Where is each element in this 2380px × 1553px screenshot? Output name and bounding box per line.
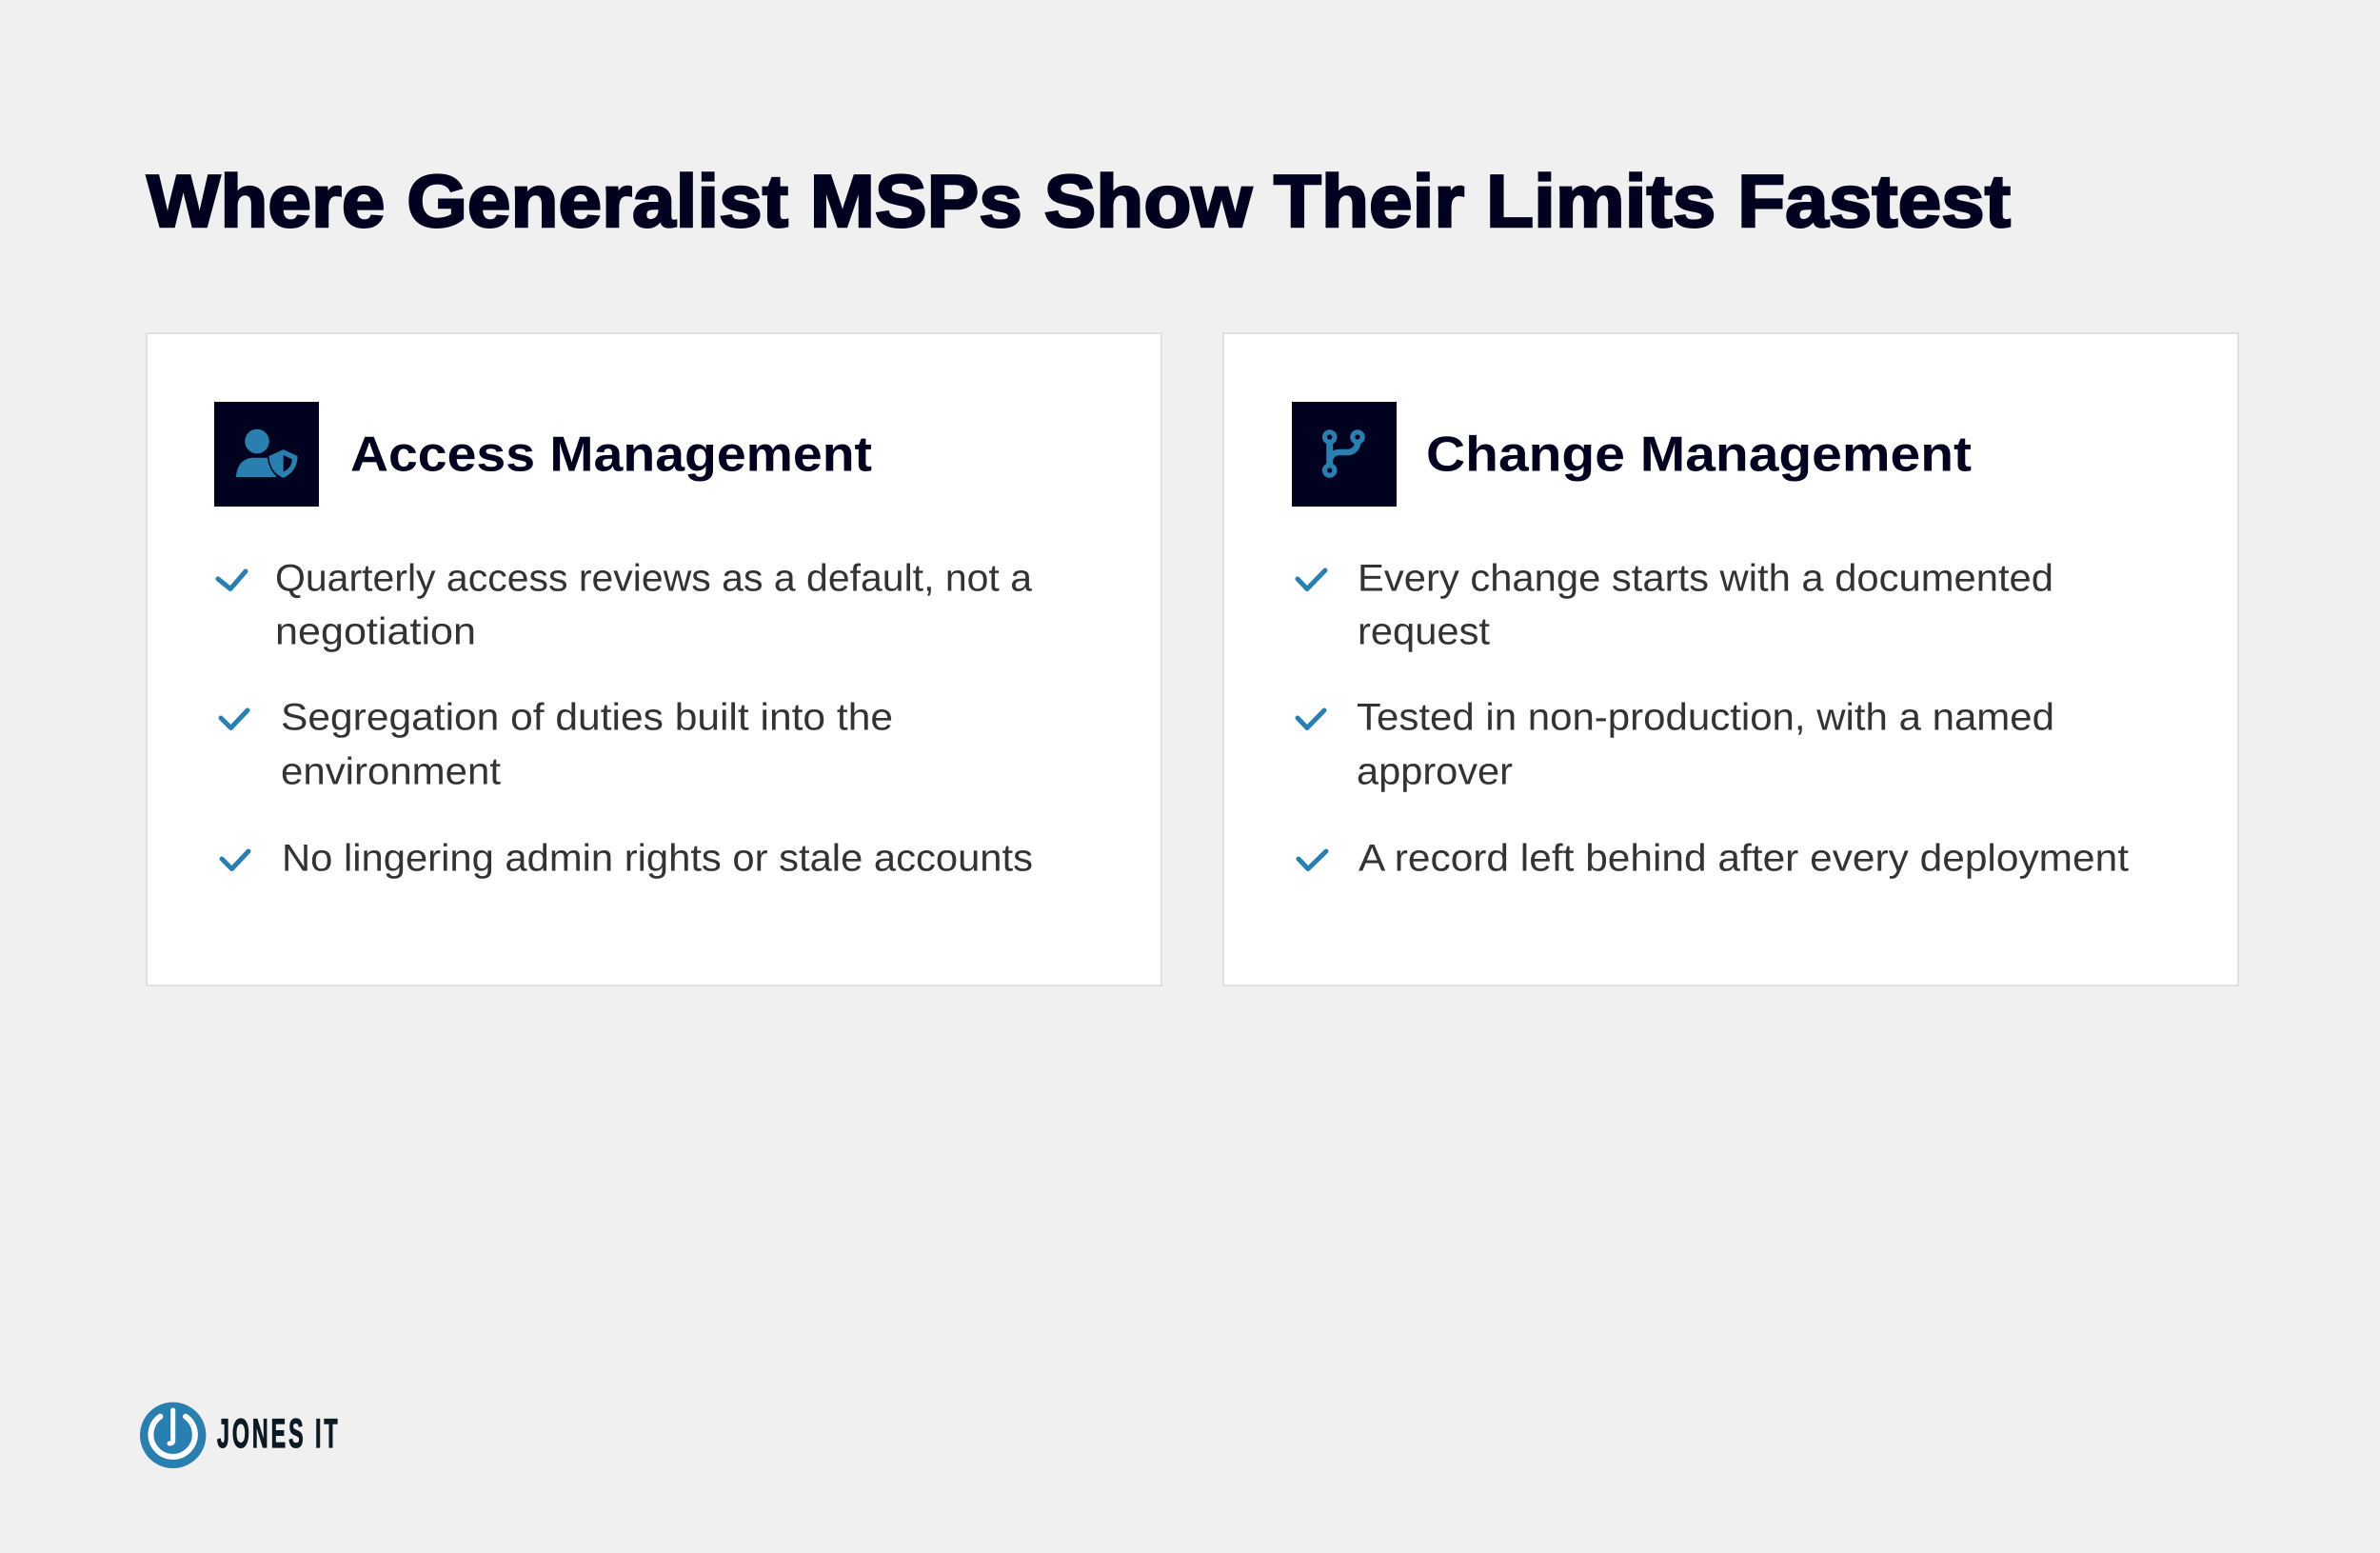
list item: quarterly access reviews: Quarterly access reviews as a default, not a (275, 558, 1033, 600)
card background (147, 333, 1161, 986)
wordmark: JONES IT (217, 1411, 341, 1457)
list item: segregation of duties: environment (281, 750, 501, 792)
icon: branch (1292, 402, 1397, 507)
title: Where Generalist MSPs Show Their Limits Fastest (147, 159, 2011, 243)
list item: tested in non-production: approver (1357, 750, 1513, 792)
icon: power symbol (140, 1403, 206, 1468)
heading: change management: Change Management (1426, 427, 1972, 482)
card background (1223, 333, 2238, 986)
list item: every change: Every change starts with a documented (1358, 558, 2053, 600)
list item: segregation of duties: Segregation of duties built into the (281, 697, 893, 739)
list item: every change (1298, 558, 2053, 653)
list item: tested in non-production (1298, 697, 2054, 792)
list item: quarterly access reviews: negotiation (275, 611, 476, 653)
list item: quarterly access reviews (218, 558, 1033, 653)
list item: tested in non-production: Tested in non-production, with a named (1357, 697, 2054, 739)
list item: segregation of duties (221, 697, 893, 792)
list item: a record left behind: A record left behind after every deployment (1359, 838, 2129, 880)
logo: Jones IT (140, 1403, 341, 1468)
list item: every change: request (1358, 611, 1490, 653)
icon: user with shield (214, 402, 319, 507)
panel: change management (1223, 333, 2238, 986)
panel: access management (147, 333, 1161, 986)
heading: access management: Access Management (350, 427, 872, 482)
list item: no lingering admin rights: No lingering admin rights or stale accounts (282, 838, 1033, 880)
